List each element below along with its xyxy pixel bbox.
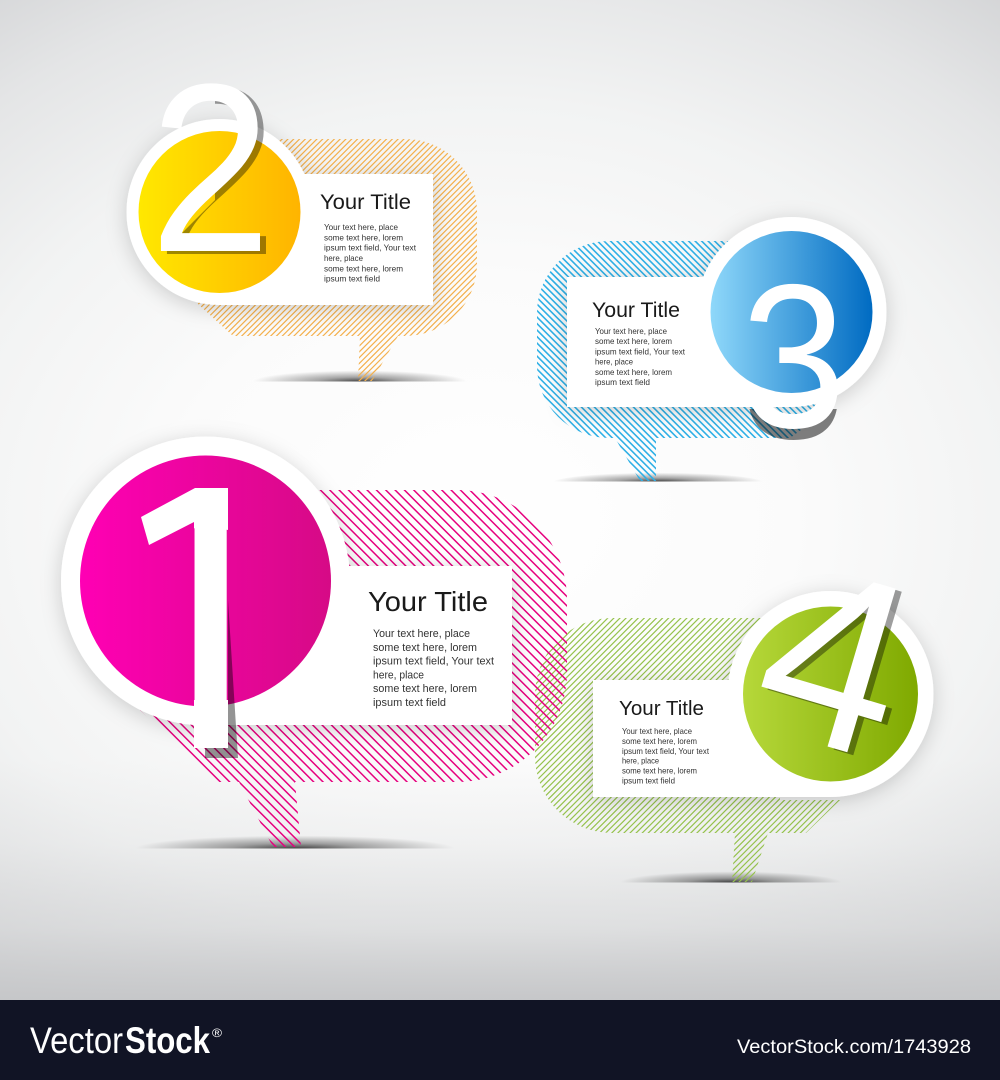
numeral 3 [750, 284, 837, 440]
footer logo: Stock [125, 1020, 210, 1061]
numeral 4: 4 [736, 509, 947, 815]
panel: step 2 [118, 84, 477, 382]
numeral 2 [160, 84, 266, 254]
title 3: Your Title [592, 299, 680, 322]
body text 3: ipsum text field [595, 377, 650, 387]
blue circle [710, 231, 872, 393]
numeral 3: 3 [741, 242, 846, 471]
body text 4: some text here, lorem [622, 737, 697, 746]
body text 2: here, place [324, 253, 363, 263]
footer logo: ® [212, 1026, 222, 1040]
body text 2: some text here, lorem [324, 232, 403, 242]
body text 1: some text here, lorem [373, 642, 477, 654]
body text 1: ipsum text field [373, 697, 446, 709]
body text 4: Your text here, place [622, 727, 692, 736]
white card and ring 2 [126, 119, 433, 305]
footer logo [30, 1020, 222, 1061]
body text 1: Your text here, place [373, 628, 470, 640]
floor shadow 1 [135, 836, 455, 848]
title 1: Your Title [368, 586, 488, 617]
white card and ring 3 [567, 217, 886, 407]
yellow circle [138, 131, 300, 293]
body text 3: ipsum text field, Your text [595, 346, 686, 356]
footer bar [0, 1000, 1000, 1080]
magenta circle [80, 456, 331, 706]
hatched bubble 1 [140, 490, 567, 847]
body text 4: ipsum text field [622, 776, 675, 786]
hatched bubble 4 [535, 618, 840, 882]
body text 3 [595, 326, 686, 387]
body text 3: some text here, lorem [595, 336, 672, 346]
numeral 3: 3 [741, 253, 846, 482]
numeral 2: 2 [156, 37, 277, 305]
panel: step 3 [537, 212, 895, 482]
white card and ring 1 [61, 436, 512, 726]
title 4: Your Title [619, 697, 704, 720]
panel: step 1 [52, 432, 567, 848]
numeral 4: 4 [730, 506, 941, 812]
body text 2 [324, 222, 417, 284]
body text 2: Your text here, place [324, 222, 398, 232]
body text 2: some text here, lorem [324, 263, 403, 273]
body text 3: some text here, lorem [595, 367, 672, 377]
panel: step 4 [535, 586, 942, 882]
green circle [743, 606, 918, 782]
floor shadow 3 [553, 473, 763, 482]
body text 1 [373, 628, 494, 709]
body text 4: ipsum text field, Your text [622, 747, 710, 756]
body text 3: here, place [595, 357, 633, 367]
title 2: Your Title [320, 191, 411, 214]
hatched bubble 3 [537, 241, 815, 481]
numeral 1: 1 [103, 419, 305, 826]
floor shadow 4 [620, 871, 842, 882]
footer image id: VectorStock.com/1743928 [737, 1036, 971, 1058]
body text 1: here, place [373, 669, 424, 681]
white card and ring 4 [593, 591, 934, 797]
body text 4: here, place [622, 757, 659, 766]
footer logo: Vector [30, 1020, 123, 1061]
numeral 2: 2 [150, 34, 271, 302]
body text 1: some text here, lorem [373, 683, 477, 695]
body text 2: ipsum text field [324, 274, 380, 284]
body text 2: ipsum text field, Your text [324, 243, 417, 253]
floor shadow 2 [253, 371, 467, 382]
body text 4 [622, 727, 710, 786]
body text 3: Your text here, place [595, 326, 667, 336]
body text 1: ipsum text field, Your text [373, 656, 494, 668]
hatched bubble 2 [198, 139, 477, 381]
body text 4: some text here, lorem [622, 767, 697, 776]
numeral 1 [141, 488, 238, 758]
